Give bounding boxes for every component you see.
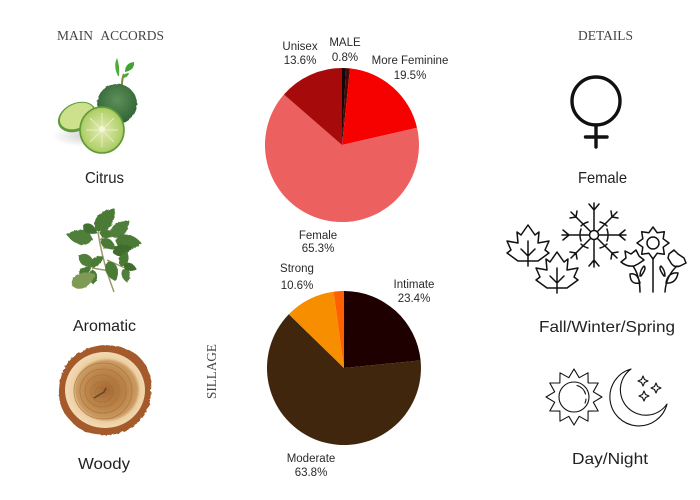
pie label: female: 65.3%	[302, 243, 334, 255]
label: seasons: Fall/Winter/Spring	[539, 319, 675, 336]
pie chart: gender	[265, 68, 419, 222]
pie label: unisex: Unisex	[282, 41, 318, 53]
pie label: male: 0.8%	[332, 52, 358, 64]
icon: sun and moon	[546, 369, 667, 426]
label: aromatic: Aromatic	[73, 318, 136, 335]
label: female: Female	[578, 170, 627, 187]
pie label: moderate: 63.8%	[295, 467, 327, 479]
icon: seasons	[507, 203, 686, 293]
icon: female symbol	[572, 77, 620, 147]
heading: details: DETAILS	[578, 29, 633, 44]
icon: aromatic herb	[65, 203, 142, 292]
pie label: moderate: Moderate	[287, 453, 335, 465]
pie label: more feminine: More Feminine	[372, 55, 448, 67]
pie label: unisex: 13.6%	[284, 55, 316, 67]
pie label: intimate: 23.4%	[398, 293, 430, 305]
label: woody: Woody	[78, 456, 130, 473]
pie label: female: Female	[299, 230, 337, 242]
icon: wood slice	[59, 345, 151, 435]
pie label: intimate: Intimate	[394, 279, 434, 291]
label: citrus: Citrus	[85, 170, 124, 187]
pie label: male: MALE	[329, 37, 361, 49]
pie label: strong: 10.6%	[281, 280, 313, 292]
icon: citrus fruit	[52, 58, 137, 153]
heading: main accords: MAIN ACCORDS	[57, 29, 164, 44]
pie chart: sillage	[267, 291, 421, 445]
pie label: more feminine: 19.5%	[394, 70, 426, 82]
pie label: strong: Strong	[280, 263, 314, 275]
axis label: sillage: SILLAGE	[205, 344, 220, 399]
label: day and night: Day/Night	[572, 451, 649, 468]
